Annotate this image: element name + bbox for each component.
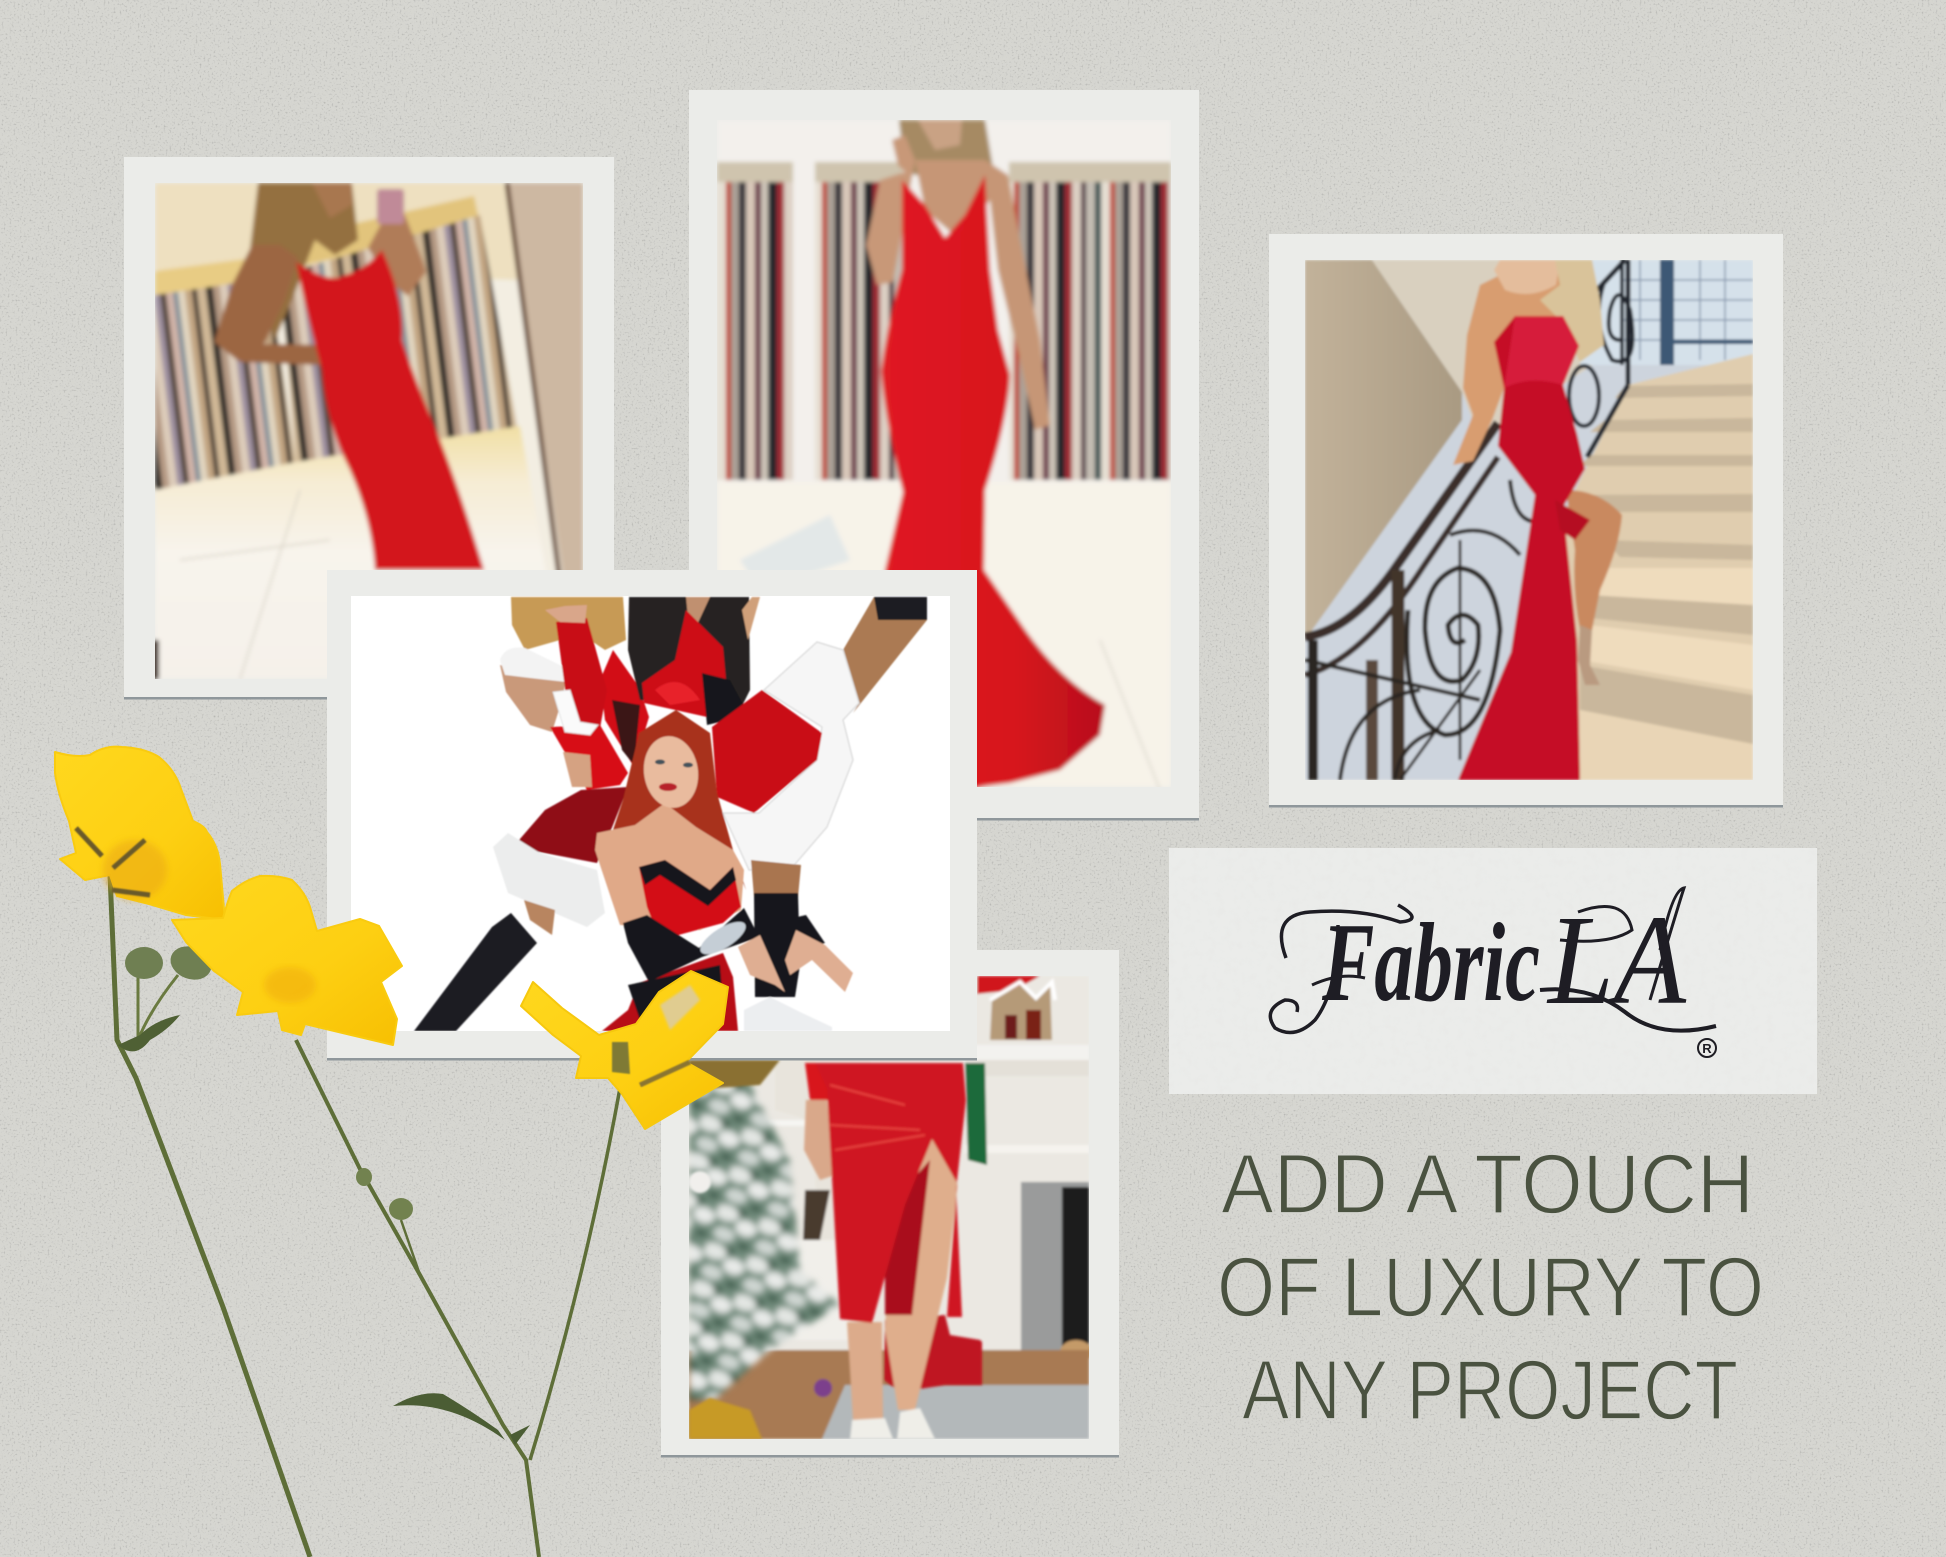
panel: photo frame, velvet gown on staircase [1269,234,1783,808]
tagline heading: ADD A TOUCH [1221,1137,1754,1231]
photo: woman on iron staircase [1305,260,1753,780]
panel: photo frame, mirror selfie in red gown [124,157,614,700]
panel: photo frame, red skirt by Christmas tree [661,950,1119,1458]
leaves and buds [118,941,530,1445]
tagline heading: ANY PROJECT [1242,1343,1738,1437]
logo: FabricLA wordmark: LA [1546,889,1687,1031]
logo: FabricLA wordmark: R [1702,1041,1712,1056]
photo: Christmas living room [689,976,1092,1439]
panel: photo frame, satin mermaid gown [689,90,1199,820]
centre woman [613,710,746,890]
icon: pressed yellow flowers and stems [55,747,728,1557]
logo: FabricLA wordmark [1270,888,1716,1057]
tagline heading: OF LUXURY TO [1217,1240,1764,1334]
photo: red gown in front of clothes racks [717,120,1171,790]
panel: photo frame, three women in Santa costumes [327,570,977,1060]
flower stem 1 [110,875,310,1557]
flower stem 2 [296,1040,539,1557]
flower 1 [55,747,225,920]
photo: boutique mirror selfie [155,183,583,680]
tagline heading [1217,1137,1764,1437]
flower 2 [172,876,402,1045]
middle woman [628,597,750,720]
flower stem 3 [530,1088,620,1460]
photo: Santa costume trio on white [351,596,950,1031]
flower 3 [521,971,728,1129]
left woman [511,597,626,650]
logo: FabricLA wordmark: Fabric [1321,901,1540,1025]
panel: logo plate [1169,848,1817,1094]
